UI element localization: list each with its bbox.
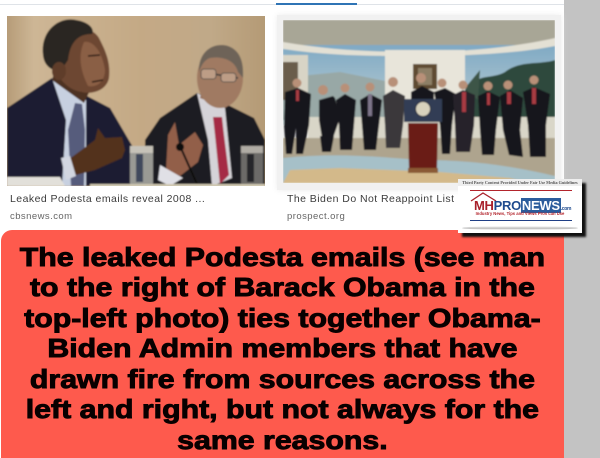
message line 6: left and right, but not always for the — [26, 394, 539, 424]
message line 4: Biden Admin members that have — [47, 333, 517, 363]
ceiling — [283, 20, 555, 60]
message line 7: same reasons. — [177, 425, 388, 455]
logo wordmark: MHPRONEWS.com — [474, 198, 571, 213]
microphone — [180, 146, 197, 184]
faces, shirts and ties — [292, 73, 538, 95]
message line 1: The leaked Podesta emails (see man — [20, 242, 545, 272]
tab underline — [0, 3, 564, 5]
message line 2: to the right of Barack Obama in the — [30, 272, 535, 302]
MHProNews logo badge — [458, 179, 582, 233]
photo: Diplomatic Room press conference — [283, 20, 555, 183]
caption: right photo source: prospect.org — [287, 211, 345, 222]
blue rule — [470, 220, 572, 221]
Obama suit — [7, 78, 138, 186]
photo: Obama and Podesta — [7, 16, 265, 186]
message line 3: top-left photo) ties together Obama- — [24, 303, 541, 333]
badge disclaimer — [458, 179, 582, 186]
Obama neck and head — [52, 60, 95, 103]
Obama hand — [68, 128, 125, 176]
podium — [404, 99, 442, 122]
wallpaper — [283, 45, 555, 125]
right grey margin — [564, 0, 600, 458]
red message panel — [1, 230, 564, 458]
door — [283, 55, 308, 100]
logo tagline: Industry News, Tips and Views Pros can Use — [476, 211, 564, 216]
name card — [7, 177, 65, 186]
red rule — [470, 190, 572, 191]
badge bottom fade — [462, 226, 578, 230]
Podesta suit — [145, 93, 265, 186]
dado — [308, 117, 555, 139]
water glasses — [130, 146, 153, 184]
chimney column — [385, 50, 465, 125]
caption: right photo title: The Biden Do Not Reappoint List — [287, 193, 454, 205]
Podesta head — [200, 80, 232, 108]
badge disclaimer: Third Party Content Provided Under Fair Use Media Guidelines — [462, 180, 578, 185]
caption: left photo source: cbsnews.com — [10, 211, 72, 222]
caption: left photo title: Leaked Podesta emails reveal 2008 ... — [10, 193, 205, 205]
Podesta hand — [166, 122, 203, 176]
carpet — [283, 138, 555, 183]
message line 5: drawn fire from sources across the — [30, 364, 535, 394]
photo card shadow — [277, 15, 561, 190]
logo roof — [470, 192, 496, 202]
group of people — [284, 86, 550, 157]
cornice — [283, 38, 555, 61]
